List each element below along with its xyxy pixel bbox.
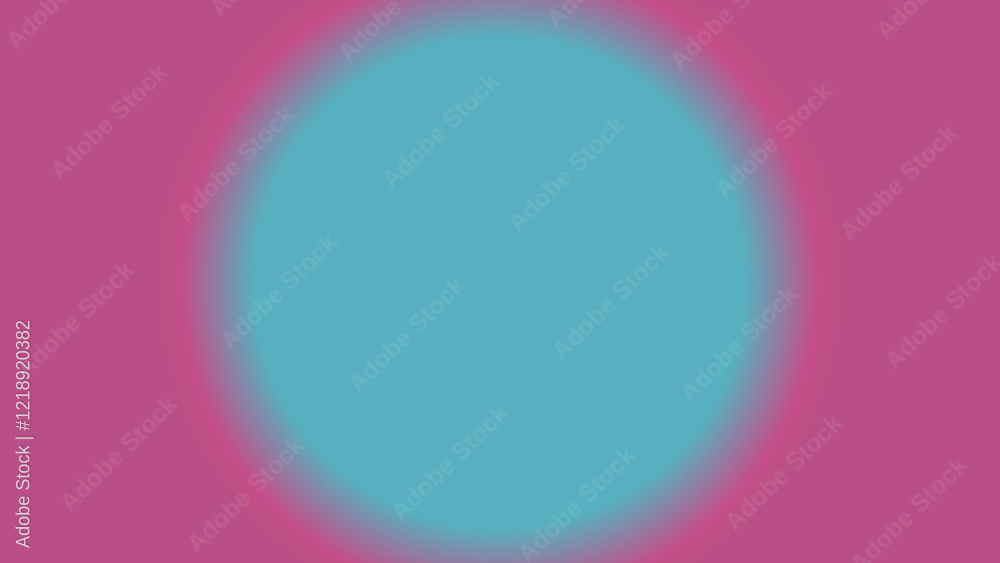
vertical stock id text: Adobe Stock | #1218920382 xyxy=(14,320,34,548)
diagonal Adobe Stock watermarks: Adobe Stock xyxy=(44,58,173,185)
vertical stock id text: Adobe Stock | #1218920382 xyxy=(14,319,35,547)
diagonal Adobe Stock watermarks: Adobe Stock xyxy=(342,271,471,398)
diagonal Adobe Stock watermarks: Adobe Stock xyxy=(719,409,848,536)
diagonal Adobe Stock watermarks: Adobe Stock xyxy=(214,228,343,355)
diagonal Adobe Stock watermarks: Adobe Stock xyxy=(11,256,140,383)
diagonal Adobe Stock watermarks: Adobe Stock xyxy=(502,110,631,237)
diagonal Adobe Stock watermarks: Adobe Stock xyxy=(54,390,183,517)
diagonal Adobe Stock watermarks: Adobe Stock xyxy=(834,119,963,246)
diagonal Adobe Stock watermarks: Adobe Stock xyxy=(546,238,675,365)
diagonal Adobe Stock watermarks: Adobe Stock xyxy=(709,77,838,204)
diagonal Adobe Stock watermarks: Adobe Stock xyxy=(376,67,505,194)
diagonal Adobe Stock watermarks: Adobe Stock xyxy=(171,100,300,227)
diagonal Adobe Stock watermarks: Adobe Stock xyxy=(181,431,310,558)
diagonal Adobe Stock watermarks: Adobe Stock xyxy=(674,280,803,407)
diagonal Adobe Stock watermarks: Adobe Stock xyxy=(385,399,514,526)
